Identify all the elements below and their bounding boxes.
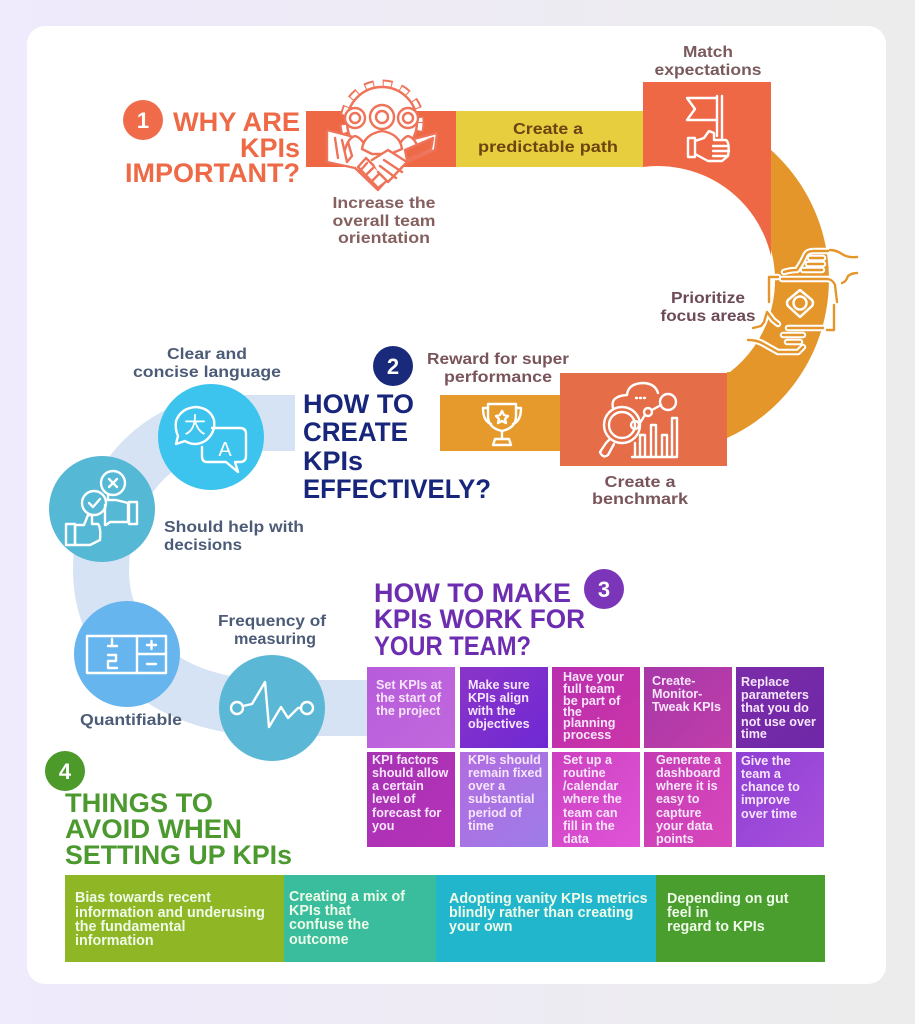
number badge 1: 1 <box>137 108 149 133</box>
circle: clear language: 大 <box>184 408 206 440</box>
number badge 4 <box>45 751 85 791</box>
heading: how to create KPIs effectively: KPIs <box>303 446 363 476</box>
card: set KPIs at start: the project <box>376 704 441 718</box>
card: create monitor tweak: Create- <box>652 674 695 688</box>
section 3: how to make KPIs work <box>367 569 824 847</box>
card: create monitor tweak <box>644 667 732 748</box>
panel: bias towards recent information: information <box>75 933 154 949</box>
label: frequency of measuring: measuring <box>234 631 316 648</box>
card: dashboard: capture <box>656 806 702 820</box>
heading: how to create KPIs effectively: CREATE <box>303 417 408 447</box>
icon: magnifier chart cloud <box>600 383 677 457</box>
card: set KPIs at start <box>367 667 455 748</box>
circle: frequency of measuring <box>219 655 325 761</box>
heading: how to make KPIs work for your team: YOUR TEAM? <box>374 631 531 661</box>
circle: clear language: A <box>218 439 232 461</box>
label: should help with decisions: Should help with <box>164 519 304 536</box>
card: routine calendar: team can <box>563 806 618 820</box>
card: dashboard: where it is <box>655 779 718 793</box>
card: KPIs remain fixed: remain fixed <box>468 766 542 780</box>
card: KPI factors forecast: you <box>372 819 394 833</box>
number badge 3 <box>584 569 624 609</box>
heading: things to avoid: AVOID WHEN <box>65 814 242 844</box>
icon: trophy <box>483 404 521 445</box>
label: create a predictable path: predictable path <box>478 139 618 156</box>
panel: match expectations box <box>643 82 771 256</box>
panel: create a benchmark box <box>560 373 727 466</box>
panel: depending on gut feel: Depending on gut <box>667 891 789 907</box>
card: full team planning: the <box>563 705 582 719</box>
card: KPIs remain fixed: over a <box>468 779 506 793</box>
panel: reward bar <box>440 395 560 451</box>
panel: adopting vanity KPIs: your own <box>449 919 513 935</box>
label: reward for super performance: Reward for super <box>427 351 569 368</box>
card: align with objectives: with the <box>467 704 516 718</box>
heading: how to make KPIs work for your team: HOW TO MAKE <box>374 578 571 608</box>
card: align with objectives: KPIs align <box>468 691 529 705</box>
label: match expectations: Match <box>683 44 733 61</box>
card: full team planning <box>552 667 640 748</box>
heading: things to avoid: THINGS TO <box>65 788 213 818</box>
heading: why are KPIs important: WHY ARE <box>173 107 300 137</box>
card: create monitor tweak: Tweak KPIs <box>652 700 721 714</box>
panel: depending on gut feel: regard to KPIs <box>667 919 765 935</box>
card: full team planning: Have your <box>563 670 624 684</box>
card: dashboard <box>644 752 732 847</box>
label: reward for super performance <box>427 351 569 386</box>
number badge 1 <box>123 100 163 140</box>
panel: creating a mix of KPIs: confuse the <box>289 917 369 933</box>
card: replace parameters <box>736 667 824 748</box>
number badge 2: 2 <box>387 354 399 379</box>
panel: creating a mix of KPIs: KPIs that <box>289 903 351 919</box>
label: reward for super performance: performance <box>444 369 552 386</box>
panel: adopting vanity KPIs: blindly rather than creating <box>449 905 633 921</box>
label: create a predictable path <box>478 121 618 156</box>
label: clear and concise language: concise language <box>133 364 281 381</box>
card: full team planning: process <box>563 728 611 742</box>
panel: creating a mix of KPIs: outcome <box>289 932 349 948</box>
card: KPI factors forecast: a certain <box>372 779 424 793</box>
label: prioritize focus areas <box>660 290 756 325</box>
label: prioritize focus areas: focus areas <box>660 308 756 325</box>
heading: why are KPIs important <box>125 107 300 188</box>
heading: how to create KPIs effectively <box>303 389 491 504</box>
section 2: benchmark, reward and path <box>49 346 727 761</box>
label: increase team orientation <box>332 195 436 247</box>
card: routine calendar: routine <box>563 766 606 780</box>
card: chance to improve: over time <box>741 807 797 821</box>
heading: how to create KPIs effectively: HOW TO <box>303 389 414 419</box>
panel: creating a mix of KPIs <box>284 875 436 962</box>
card: replace parameters: Replace <box>741 675 789 689</box>
card: full team planning: full team <box>563 682 615 696</box>
card: chance to improve: improve <box>741 793 790 807</box>
card: KPI factors forecast: level of <box>372 792 416 806</box>
label: create a predictable path: Create a <box>513 121 583 138</box>
panel: bias towards recent information: the fundamental <box>75 919 185 935</box>
circle: clear language <box>158 384 264 490</box>
card: chance to improve: chance to <box>741 780 800 794</box>
icon: flag in fist <box>687 96 729 161</box>
card: KPI factors forecast: forecast for <box>372 806 441 820</box>
panel: adopting vanity KPIs: Adopting vanity KPIs metrics <box>449 891 648 907</box>
heading: things to avoid: SETTING UP KPIs <box>65 840 292 870</box>
heading: how to create KPIs effectively: EFFECTIVELY? <box>303 474 491 504</box>
card: chance to improve <box>736 752 824 847</box>
label: prioritize focus areas: Prioritize <box>671 290 745 307</box>
icon: framing hands on target <box>748 250 857 352</box>
card: chance to improve: Give the <box>741 754 791 768</box>
card: KPIs remain fixed <box>460 752 548 847</box>
card: chance to improve: team a <box>741 767 782 781</box>
card: create monitor tweak: Monitor- <box>652 687 702 701</box>
panel: adopting vanity KPIs <box>436 875 656 962</box>
panel: bias towards recent information <box>65 875 284 962</box>
label: match expectations: expectations <box>654 62 762 79</box>
card: replace parameters: time <box>741 727 767 741</box>
card: routine calendar <box>552 752 640 847</box>
card: KPIs remain fixed: KPIs should <box>468 753 541 767</box>
card: set KPIs at start: the start of <box>376 691 442 705</box>
label: match expectations <box>654 44 762 79</box>
card: routine calendar: Set up a <box>563 753 613 767</box>
card: KPIs remain fixed: substantial <box>468 792 534 806</box>
label: should help with decisions <box>164 519 304 554</box>
panel: predictable path bar <box>456 111 643 167</box>
card: KPI factors forecast: KPI factors <box>372 753 438 767</box>
panel: bias towards recent information: information and underusing <box>75 905 265 921</box>
label: clear and concise language <box>133 346 281 381</box>
card: align with objectives: objectives <box>468 717 530 731</box>
heading: why are KPIs important: IMPORTANT? <box>125 158 300 188</box>
card: set KPIs at start: Set KPIs at <box>376 678 443 692</box>
card: KPI factors forecast <box>367 752 455 847</box>
icon: gear team handshake <box>327 86 437 190</box>
card: replace parameters: not use over <box>741 715 816 729</box>
heading: how to make KPIs work for your team: KPIs WORK FOR <box>374 604 585 634</box>
label: increase team orientation: overall team <box>332 213 436 230</box>
panel: depending on gut feel: feel in <box>667 905 708 921</box>
label: frequency of measuring: Frequency of <box>218 613 327 630</box>
card: dashboard: your data <box>656 819 714 833</box>
circle: quantifiable <box>74 601 180 707</box>
card: replace parameters: that you do <box>741 701 809 715</box>
card: KPIs remain fixed: period of <box>468 806 523 820</box>
card: full team planning: planning <box>563 716 615 730</box>
number badge 4: 4 <box>59 759 72 784</box>
number badge 3: 3 <box>598 577 610 602</box>
heading: how to make KPIs work for your team <box>374 578 585 661</box>
circle: should help with decisions <box>49 456 155 562</box>
card: align with objectives: Make sure <box>468 678 530 692</box>
card: KPI factors forecast: should allow <box>372 766 448 780</box>
curved path: gold arc <box>727 150 829 438</box>
card: replace parameters: parameters <box>741 688 809 702</box>
card: routine calendar: fill in the <box>563 819 615 833</box>
label: create a benchmark: Create a <box>604 474 676 491</box>
panel: bias towards recent information: Bias towards recent <box>75 890 211 906</box>
card: routine calendar: where the <box>562 792 622 806</box>
panel: creating a mix of KPIs: Creating a mix of <box>289 889 405 905</box>
label: should help with decisions: decisions <box>164 537 242 554</box>
section 1: why are KPIs important <box>123 44 857 438</box>
card: align with objectives <box>460 667 548 748</box>
heading: things to avoid <box>65 788 292 870</box>
panel: depending on gut feel <box>656 875 825 962</box>
panel: team orientation bar <box>306 111 456 167</box>
connector band <box>101 423 368 708</box>
label: increase team orientation: Increase the <box>332 195 436 212</box>
label: clear and concise language: Clear and <box>167 346 247 363</box>
card: routine calendar: data <box>563 832 590 846</box>
card: dashboard: dashboard <box>656 766 720 780</box>
heading: why are KPIs important: KPIs <box>240 133 300 163</box>
label: frequency of measuring <box>218 613 327 648</box>
number badge 2 <box>373 346 413 386</box>
card: KPIs remain fixed: time <box>468 819 494 833</box>
section 4: things to avoid <box>45 751 825 962</box>
card: dashboard: Generate a <box>656 753 722 767</box>
card: full team planning: be part of <box>563 694 621 708</box>
card: dashboard: easy to <box>656 792 700 806</box>
label: create a benchmark <box>592 474 688 508</box>
label: increase team orientation: orientation <box>338 230 430 247</box>
card: dashboard: points <box>656 832 694 846</box>
label: quantifiable: Quantifiable <box>80 712 182 729</box>
label: create a benchmark: benchmark <box>592 491 688 508</box>
card: routine calendar: /calendar <box>563 779 618 793</box>
